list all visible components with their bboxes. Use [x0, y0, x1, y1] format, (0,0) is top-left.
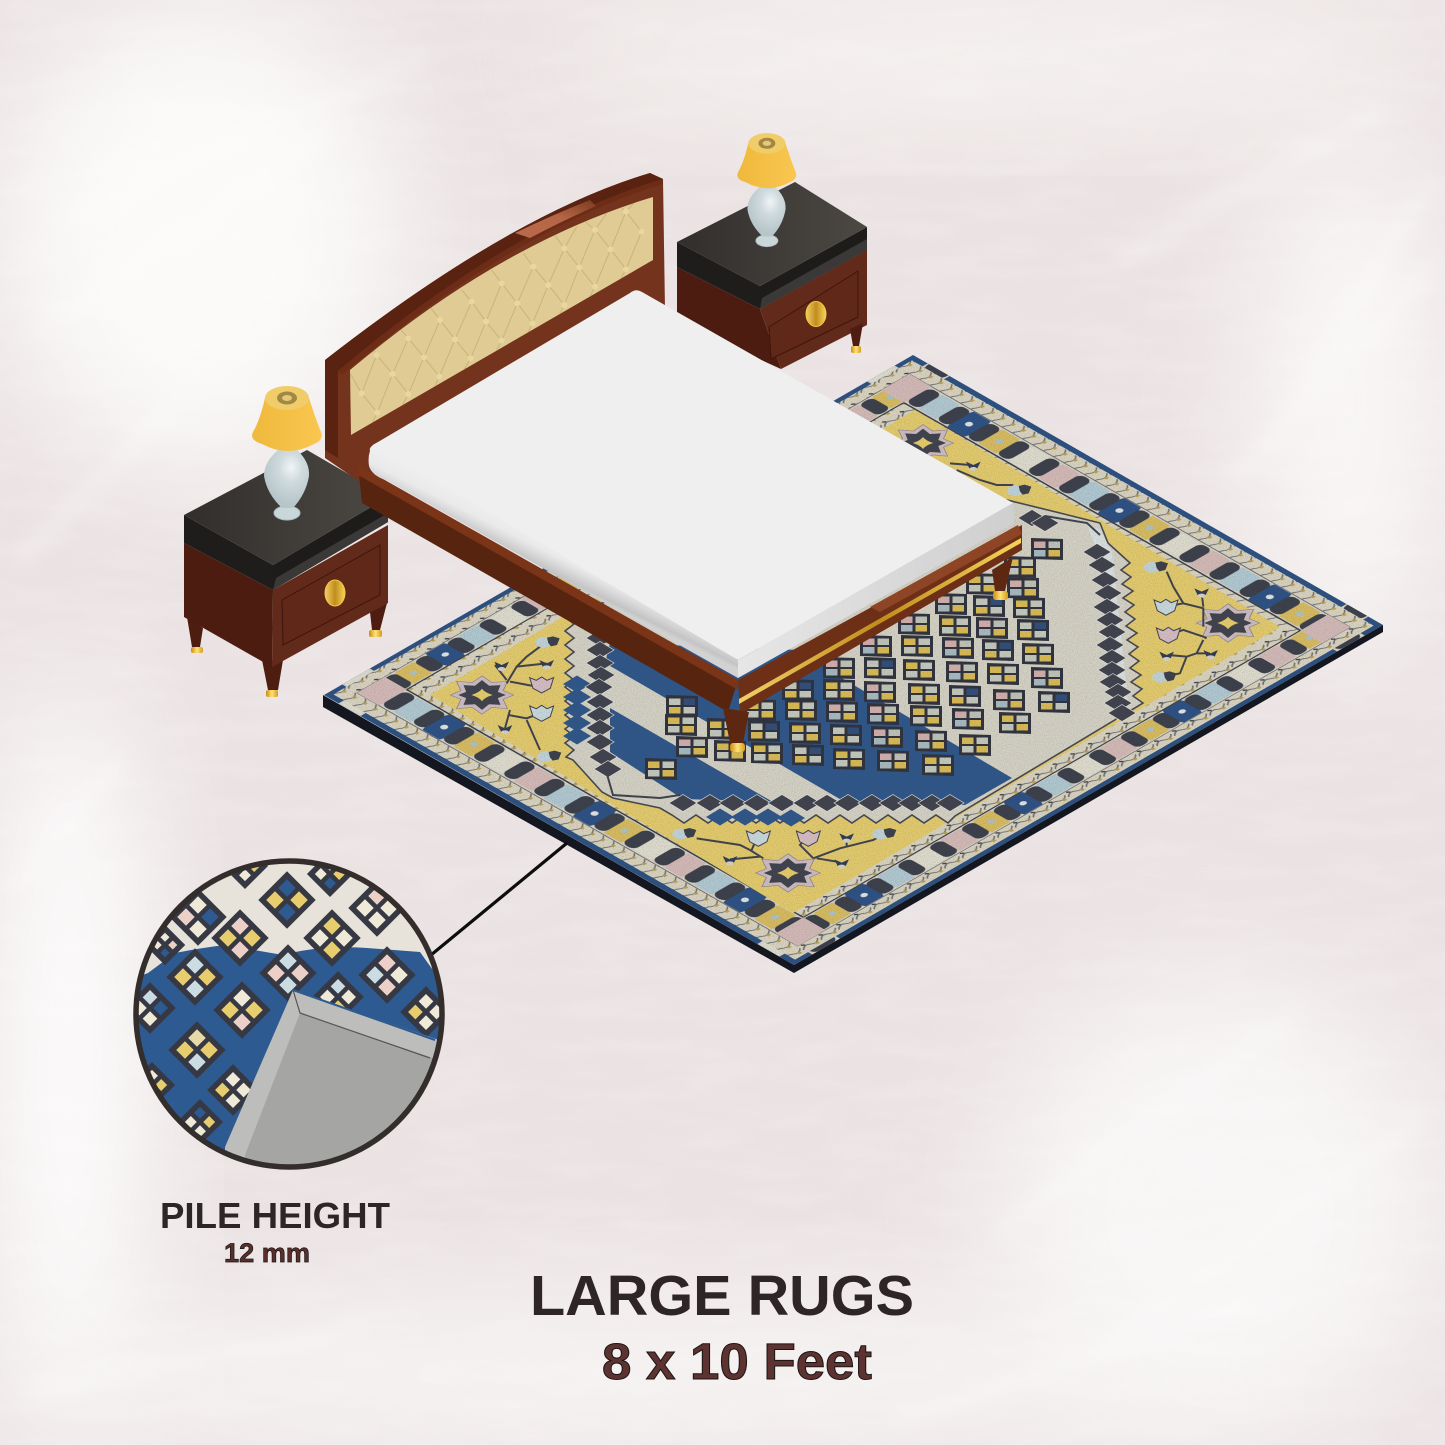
rug pale band beside right zigzag: [1087, 524, 1128, 722]
vase: [264, 450, 309, 520]
tufted cushion: [350, 200, 645, 433]
headboard: [325, 173, 665, 482]
right corner floral sprigs: [1144, 561, 1218, 683]
left nightstand: [184, 450, 388, 697]
left side rail: [358, 465, 738, 712]
nightstand drawer: [282, 545, 380, 645]
rug hexagon outline strokes: [604, 516, 1100, 798]
lampshade: [252, 398, 322, 451]
leg: [850, 323, 863, 353]
drawer knob: [325, 580, 345, 606]
rug central hexagon with stepped edges: [565, 500, 1143, 823]
rug inner blue field: [605, 643, 1012, 805]
top: [677, 182, 867, 309]
circle ring: [136, 861, 442, 1167]
rug thickness edge: [323, 625, 1383, 973]
rug dark diamond rows: [583, 510, 1136, 812]
nightstand body: [184, 543, 273, 667]
left lamp: [252, 386, 322, 520]
mattress: [369, 290, 1014, 678]
right side rail: [738, 525, 1022, 714]
subtitle: size: 8 x 10 Feet: [602, 1333, 872, 1390]
rug: isometric patterned carpet: [323, 355, 1383, 973]
detail circle: rug close-up with folded backing: [133, 858, 445, 1170]
shade top: [265, 386, 309, 410]
rug outer blue stripe: [610, 708, 773, 802]
bed: [325, 173, 1022, 752]
title: large rugs: LARGE RUGS: [530, 1264, 914, 1328]
bed legs: [723, 557, 1013, 752]
label: pile height: PILE HEIGHT: [160, 1195, 390, 1236]
rug pile grain: [324, 355, 1383, 965]
connector line from rug to detail circle: [431, 843, 567, 955]
folded grey backing: [225, 989, 437, 1164]
nightstand legs: [187, 603, 387, 697]
knob: [806, 302, 826, 326]
top corner floral sprigs: [950, 462, 1031, 496]
right lamp: [737, 133, 796, 247]
left corner floral sprigs: [494, 636, 561, 762]
rug centre tile lattice: [645, 538, 1070, 780]
drawer: [769, 271, 858, 359]
rug blue teeth: [563, 676, 805, 826]
tile clusters: [138, 865, 440, 1140]
label: 12 mm: 12 mm: [224, 1238, 310, 1268]
right nightstand: [677, 182, 867, 369]
rug border bands: [324, 355, 1383, 965]
nightstand top: [184, 450, 388, 590]
bottom corner floral sprigs: [672, 828, 896, 869]
rug yellow field: [430, 410, 1280, 913]
rug corner medallions: [450, 424, 1260, 892]
